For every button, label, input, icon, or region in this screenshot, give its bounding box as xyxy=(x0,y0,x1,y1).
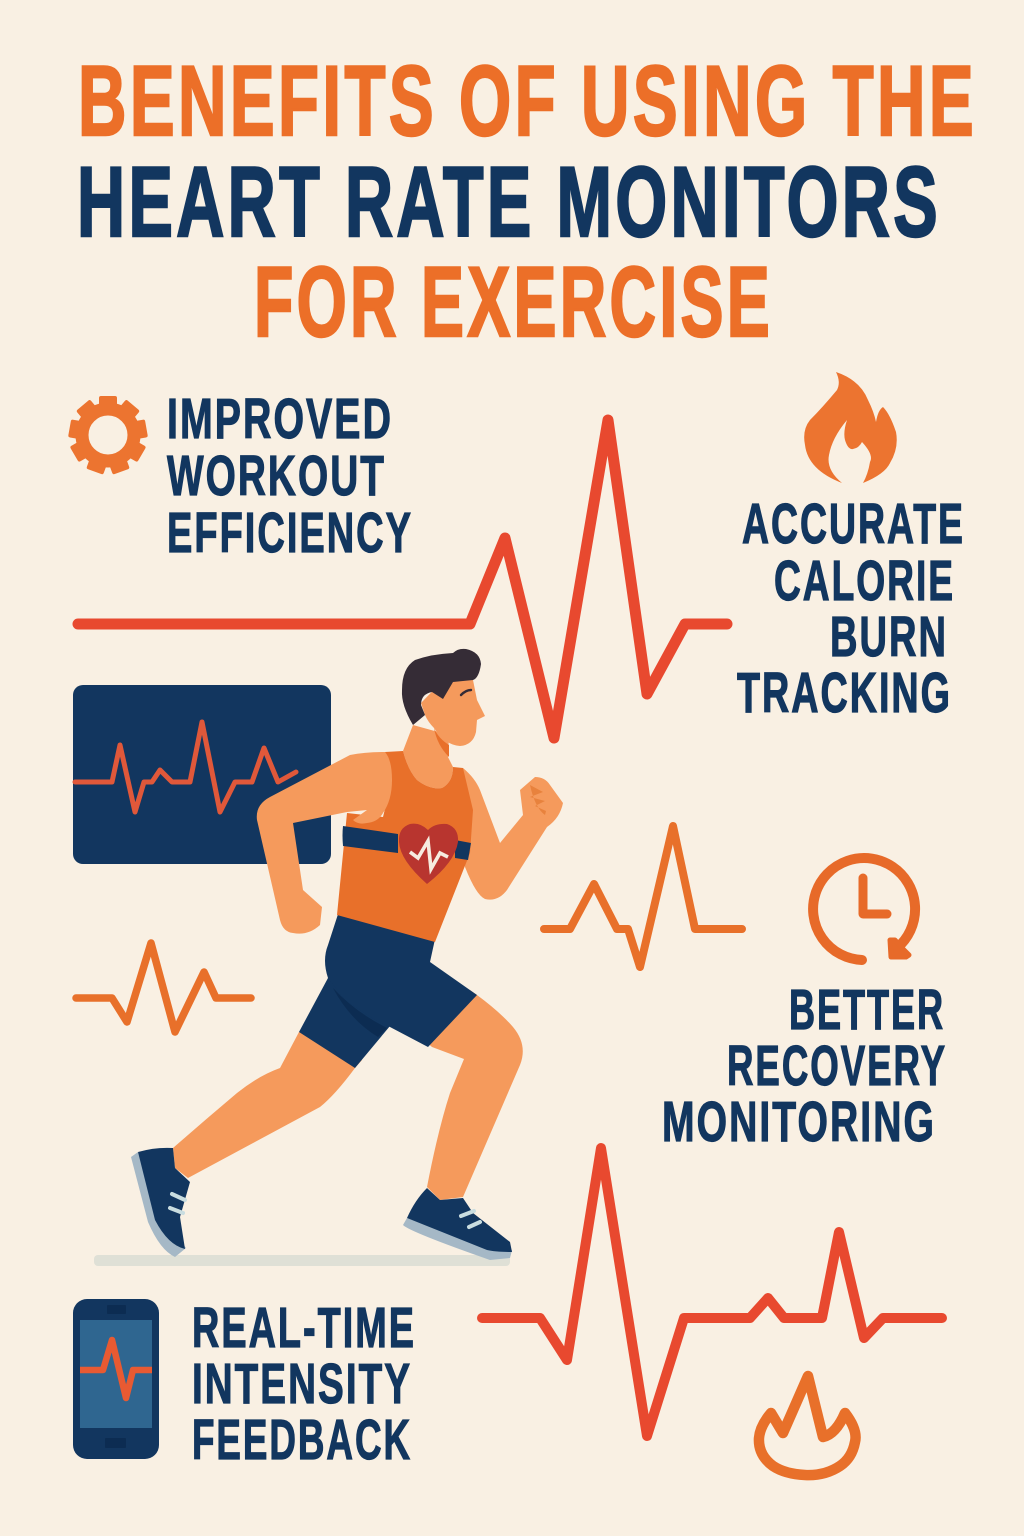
right arm xyxy=(463,768,563,900)
fist details xyxy=(530,785,546,815)
heart sensor xyxy=(399,824,458,884)
illustration: runner xyxy=(131,649,563,1260)
heartbeat line: middle right xyxy=(544,826,742,967)
icon: flame xyxy=(804,372,897,483)
text: better recovery monitoring xyxy=(662,978,947,1154)
neck shadow xyxy=(434,728,449,757)
title xyxy=(77,45,977,357)
text: real-time intensity feedback: INTENSITY xyxy=(192,1352,412,1416)
ground shadow xyxy=(94,1255,510,1266)
heartbeat line: left small xyxy=(76,943,251,1032)
heart pulse xyxy=(410,841,448,869)
text: improved workout efficiency: WORKOUT xyxy=(167,444,386,508)
chest strap xyxy=(342,826,471,860)
shorts xyxy=(325,908,477,1047)
neck xyxy=(403,725,453,788)
heartbeat line: top xyxy=(78,420,727,738)
hair xyxy=(402,649,481,725)
left arm xyxy=(257,752,392,934)
text: real-time intensity feedback: FEEDBACK xyxy=(192,1408,412,1472)
text: real-time intensity feedback: REAL-TIME xyxy=(192,1296,416,1360)
icon: gear xyxy=(68,396,148,475)
text: improved workout efficiency xyxy=(167,387,413,565)
tank top xyxy=(337,751,473,942)
shorts shadow xyxy=(333,988,387,1037)
icon: smartphone xyxy=(73,1299,159,1459)
shorts back part xyxy=(299,960,395,1068)
head xyxy=(421,670,485,746)
text: improved workout efficiency: IMPROVED xyxy=(167,387,393,451)
eye xyxy=(461,690,471,695)
text: real-time intensity feedback xyxy=(192,1296,416,1472)
panel: monitor screen xyxy=(73,685,331,864)
heartbeat line: bottom xyxy=(482,1148,942,1436)
back shoe xyxy=(131,1148,190,1257)
text: improved workout efficiency: EFFICIENCY xyxy=(167,501,413,565)
text: accurate calorie burn tracking xyxy=(737,492,965,725)
front shoe xyxy=(403,1188,512,1260)
text: accurate calorie burn tracking: BURN xyxy=(830,605,948,669)
front leg xyxy=(424,990,523,1200)
icon: recovery clock xyxy=(813,858,915,960)
back leg xyxy=(173,1024,362,1178)
icon: outlined flame xyxy=(759,1376,856,1475)
